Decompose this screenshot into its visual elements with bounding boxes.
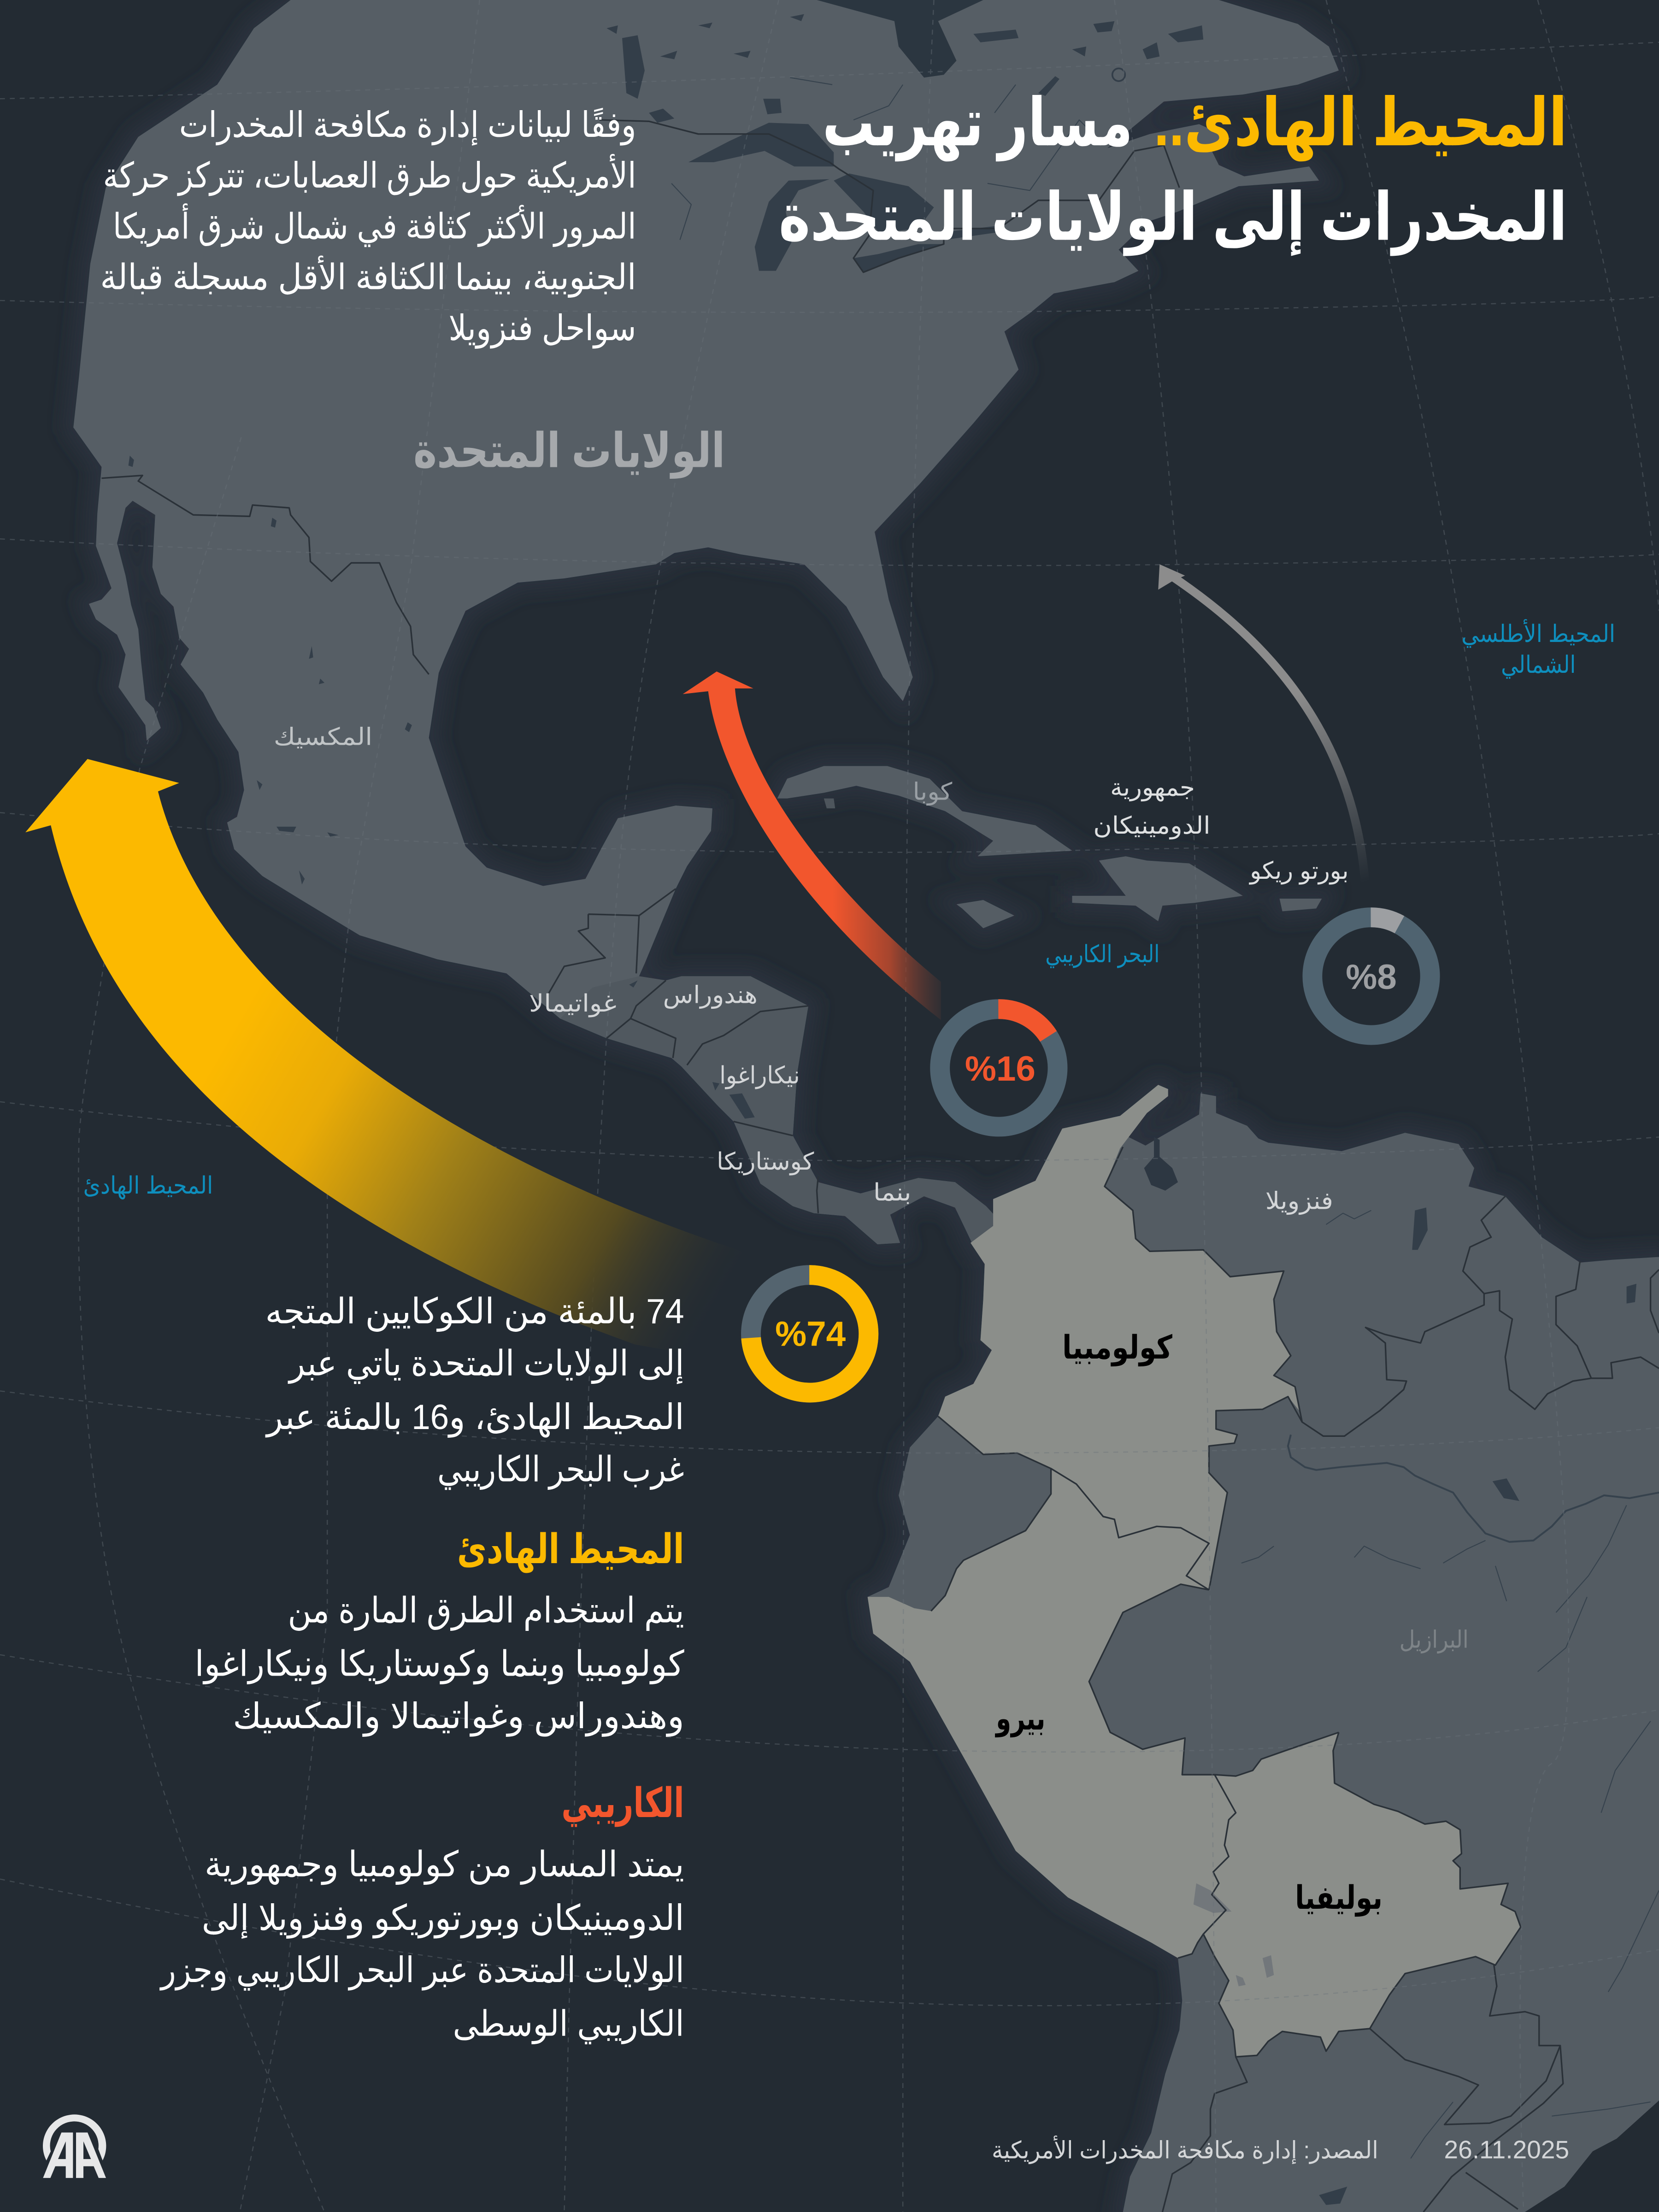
title [779,86,1567,256]
intro text: المرور الأكثر كثافة في شمال شرق أمريكا [113,203,636,247]
heading: pacific: المحيط الهادئ [457,1526,684,1573]
arrow: eastern caribbean route [1158,564,1365,889]
text: pacific route [194,1591,684,1737]
source: المصدر: إدارة مكافحة المخدرات الأمريكية [992,2136,1378,2165]
map label: cuba: كوبا [913,779,953,806]
map label: caribbean sea: البحر الكاريبي [1045,941,1159,968]
map label: puerto rico: بورتو ريكو [1248,858,1349,885]
map label: nicaragua: نيكاراغوا [719,1062,800,1089]
icon: agency logo [43,2114,106,2178]
map label: mexico: المكسيك [274,724,372,750]
intro text [100,106,636,349]
right coast water [1525,2100,1659,2212]
donut: 74 percent pacific: %74 [775,1314,846,1353]
colombia and peru [868,1085,1299,1958]
map label: costa rica: كوستاريكا [717,1148,814,1176]
map label: honduras: هندوراس [663,982,758,1009]
rivers [671,77,1659,2159]
intro text: الأمريكية حول طرق العصابات، تتركز حركة [103,154,636,196]
titicaca and salt flats [1194,1883,1274,1986]
intro text: سواحل فنزويلا [448,309,636,349]
north and central america [73,0,1339,1244]
summary text: 74 بالمئة من الكوكايين المتجه [265,1292,684,1332]
map label: north atlantic: المحيط الأطلسي [1461,619,1615,648]
text: pacific route: كولومبيا وبنما وكوستاريكا ونيكاراغوا [194,1645,684,1685]
map label: pacific ocean: المحيط الهادئ [83,1172,213,1200]
map label: brazil: البرازيل [1400,1627,1469,1654]
map label: peru: بيرو [995,1700,1045,1737]
title: مسار تهريب [823,86,1133,161]
text: caribbean route: يمتد المسار من كولومبيا وجمهورية [205,1845,684,1885]
arrow: western caribbean route [683,671,941,1020]
central america shading [560,976,1003,1244]
text: caribbean route [159,1845,684,2044]
intro text: وفقًا لبيانات إدارة مكافحة المخدرات [179,106,636,146]
map label: dominican republic: جمهورية [1110,775,1195,802]
donut: 74 percent pacific [751,1275,869,1393]
text: caribbean route: الكاريبي الوسطى [453,2004,684,2044]
donut: 16 percent western caribbean: %16 [965,1049,1035,1088]
text: pacific route: وهندوراس وغواتيمالا والمكسيك [233,1697,684,1737]
map label: colombia: كولومبيا [1062,1329,1172,1366]
date: 26.11.2025 [1444,2136,1569,2164]
map label: united states: الولايات المتحدة [413,424,725,479]
map label: bolivia: بوليفيا [1295,1879,1382,1917]
map label: venezuela: فنزويلا [1265,1188,1333,1215]
summary text [265,1292,684,1490]
donut: 16 percent western caribbean [940,1009,1058,1127]
donut: 8 percent eastern caribbean [1312,918,1430,1035]
text: caribbean route: الولايات المتحدة عبر البحر الكاريبي وجزر [159,1951,684,1991]
south america base [868,1085,1659,2212]
map label: dominican republic: الدومينيكان [1093,812,1211,840]
map label: north atlantic: الشمالي [1501,652,1576,679]
map label: dominican republic [1093,775,1211,840]
lakes and hudson bay [129,0,1203,1119]
map label: panama: بنما [873,1179,912,1206]
intro text: الجنوبية، بينما الكثافة الأقل مسجلة قبالة [100,256,636,298]
bolivia [1203,1732,1521,2057]
lake maracaibo [1144,1137,1178,1191]
summary text: إلى الولايات المتحدة ياتي عبر [288,1344,684,1384]
donut: 8 percent eastern caribbean: %8 [1346,958,1397,997]
arrow: pacific route [25,759,751,1357]
summary text: غرب البحر الكاريبي [437,1450,684,1490]
text: caribbean route: الدومينيكان وبورتوريكو وفنزويلا إلى [202,1899,684,1939]
caribbean islands [777,766,1322,928]
map label: north atlantic [1461,619,1615,679]
summary text: المحيط الهادئ، و16 بالمئة عبر [265,1398,684,1438]
heading: caribbean: الكاريبي [561,1780,684,1827]
text: pacific route: يتم استخدام الطرق المارة من [288,1591,684,1631]
title: المحيط الهادئ.. [1154,86,1567,161]
map label: guatemala: غواتيمالا [529,990,617,1018]
